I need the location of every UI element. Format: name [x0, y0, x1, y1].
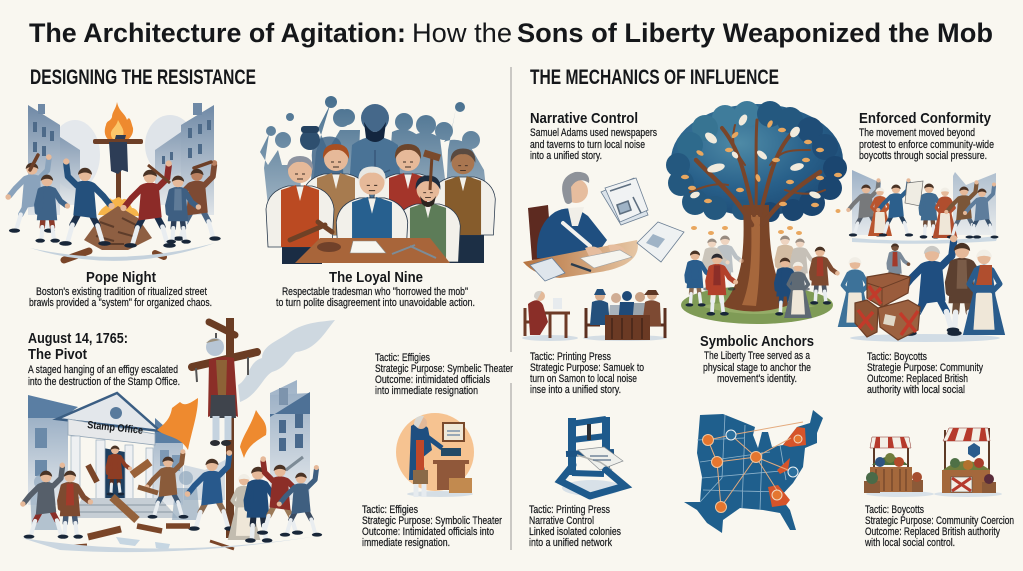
text: tactic effigies upper: Strategic Purpose: Symbelic Theater — [375, 363, 513, 375]
illustration: Stamp Office riot and hanging effigy — [20, 318, 335, 552]
text: Narrative Control — [530, 110, 657, 162]
title: Sons of Liberty Weaponized the Mob — [517, 18, 993, 48]
text: tactic effigies lower: Tactic: Effigies — [362, 504, 418, 516]
text: tactic printing press lower: into a unified network — [529, 537, 612, 549]
text: tactic boycotts upper: Strategie Purpose: Community — [867, 362, 983, 374]
text: tactic boycotts upper — [867, 351, 983, 396]
title: How the — [412, 18, 512, 48]
building label: Stamp Office — [87, 419, 144, 437]
text: Symbolic Anchors — [700, 333, 814, 385]
illustration: Samuel Adams writing — [523, 172, 684, 281]
text: tactic printing press lower: Tactic: Printing Press — [529, 504, 610, 516]
text: Pope Night: Boston's existing tradition of ritualized street — [36, 286, 207, 298]
text: Narrative Control: and taverns to turn local noise — [530, 139, 645, 151]
text: The Loyal Nine — [276, 269, 475, 309]
text: Enforced Conformity: The movement moved beyond — [859, 127, 975, 139]
text: Enforced Conformity: Enforced Conformity — [859, 110, 992, 127]
text: Symbolic Anchors: The Liberty Tree served as a — [704, 350, 811, 362]
heading: designing the resistance: DESIGNING THE RESISTANCE — [30, 66, 256, 89]
text: tactic printing press lower — [529, 504, 621, 549]
text: tactic boycotts upper: authority with local social — [867, 384, 965, 396]
title: The Architecture of Agitation: — [29, 18, 406, 48]
text: Narrative Control: Narrative Control — [530, 110, 638, 127]
text: Enforced Conformity: boycotts through social pressure. — [859, 150, 987, 162]
map: colonial network — [684, 410, 823, 533]
illustration: The Loyal Nine — [260, 96, 495, 264]
text: Pope Night: Pope Night — [86, 269, 156, 286]
text: tactic printing press upper: Tactic: Printing Press — [530, 351, 611, 363]
text: tactic boycotts upper: Tactic: Boycotts — [867, 351, 927, 363]
text: August 14, 1765 The Pivot — [28, 330, 180, 388]
text: tactic effigies upper: into immediate resignation — [375, 385, 478, 397]
illustration: Liberty Tree with crowd — [666, 101, 847, 324]
text: tactic effigies lower: immediate resignation. — [362, 537, 450, 549]
text: tactic printing press upper: inse into a unified story. — [530, 384, 621, 396]
text: tactic boycotts lower: Tactic: Boycotts — [865, 504, 924, 516]
text: Narrative Control: into a unified story. — [530, 150, 602, 162]
text: tactic printing press upper: turn on Samon to local noise — [530, 373, 637, 385]
text: Narrative Control: Samuel Adams used newspapers — [530, 127, 657, 139]
text: Symbolic Anchors: Symbolic Anchors — [700, 333, 814, 350]
text: tactic effigies lower: Strategic Purpose: Symbolic Theater — [362, 515, 502, 527]
illustration: market stalls — [864, 428, 1002, 497]
illustration: tavern and writing scene — [522, 289, 667, 341]
text: tactic printing press upper: Strategic Purpose: Samuek to — [530, 362, 644, 374]
text: tactic boycotts lower — [864, 504, 1014, 549]
text: Enforced Conformity: protest to enforce community-wide — [859, 139, 994, 151]
text: Symbolic Anchors: movement's identity. — [717, 373, 797, 385]
text: tactic printing press lower: Narrative Control — [529, 515, 594, 527]
text: The Loyal Nine: Respectable tradesman who "horrowed the mob" — [282, 286, 468, 298]
heading: the mechanics of influence: THE MECHANICS OF INFLUENCE — [530, 66, 779, 89]
text: tactic boycotts upper: Outcome: Replaced British — [867, 373, 968, 385]
text: tactic printing press lower: Linked isolated colonies — [529, 526, 621, 538]
text: The Loyal Nine: to turn polite disagreement into unavoidable action. — [276, 297, 475, 309]
text: tactic effigies lower — [362, 504, 502, 549]
text: tactic effigies upper: Tactic: Effigies — [375, 352, 430, 364]
illustration: printing press — [560, 417, 625, 496]
text: August 14, 1765 The Pivot: A staged hanging of an effigy escalated — [28, 364, 178, 376]
icon: official resigning at desk — [396, 413, 474, 497]
illustration: Pope Night street brawl — [5, 102, 221, 261]
text: The Loyal Nine: The Loyal Nine — [329, 269, 423, 286]
text: August 14, 1765 The Pivot: August 14, 1765: — [28, 330, 128, 347]
text: tactic printing press upper — [530, 351, 644, 396]
text: Symbolic Anchors: physical stage to anchor the — [703, 362, 811, 374]
title — [29, 18, 993, 48]
text: August 14, 1765 The Pivot: The Pivot — [28, 346, 87, 363]
illustration: enforced boycott crowd — [838, 170, 1005, 342]
text: August 14, 1765 The Pivot: into the destruction of the Stamp Office. — [28, 376, 180, 388]
text: Enforced Conformity — [859, 110, 994, 162]
text: tactic effigies upper: Outcome: intimidated officials — [375, 374, 490, 386]
text: tactic boycotts lower: with local social control. — [864, 537, 955, 549]
text: Pope Night — [29, 269, 212, 309]
text: Pope Night: brawls provided a "system" for organized chaos. — [29, 297, 212, 309]
text: tactic effigies lower: Outcome: Intimidated officials into — [362, 526, 494, 538]
text: tactic effigies upper — [375, 352, 513, 397]
